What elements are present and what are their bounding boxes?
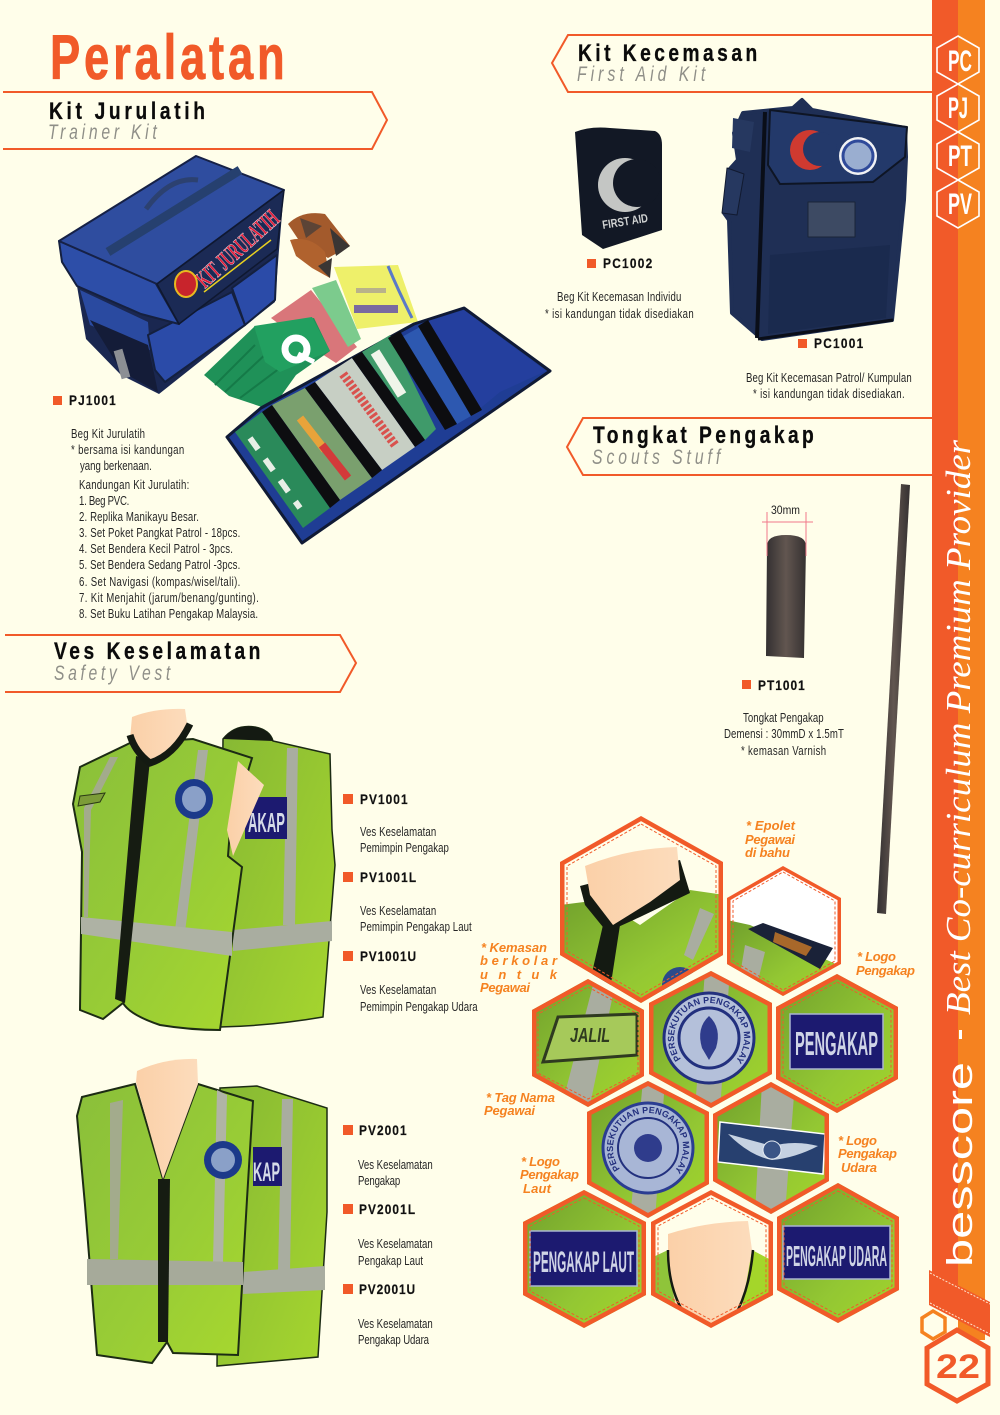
boots	[288, 213, 350, 278]
text: PV2001L description	[358, 1238, 433, 1268]
carry bag: KIT JURULATIH	[191, 205, 285, 293]
text: PV2001U description	[358, 1318, 433, 1347]
hexagon: sea scout logo: PERSEKUTUAN PENGAKAP MALAYSIA	[606, 1106, 690, 1174]
photo: first aid pouch	[575, 128, 662, 249]
heading: Ves Keselamatan: Safety Vest	[54, 661, 171, 685]
hexagon: name tag detail: JALIL	[570, 1025, 610, 1047]
note: collar: Pegawai	[480, 980, 530, 995]
carry bag	[59, 156, 285, 394]
note: air scout logo	[838, 1133, 897, 1175]
text: PV1001L description: Ves Keselamatan	[360, 905, 436, 918]
heading: Kit Jurulatih: Trainer Kit	[48, 120, 157, 144]
note: sea scout logo	[520, 1154, 579, 1196]
hexagon: Pengakap patch: PENGAKAP	[795, 1025, 878, 1062]
text: PV2001L description: Pengakap Laut	[358, 1255, 424, 1268]
book	[334, 265, 418, 329]
hexagon: Pengakap patch	[776, 974, 898, 1113]
note: scout logo: Pengakap	[856, 963, 915, 978]
roll-up pouch	[227, 308, 550, 543]
hexagon: air scout patch	[710, 1080, 832, 1216]
note: sea scout logo: Pengakap	[520, 1167, 579, 1182]
note: air scout logo: * Logo	[838, 1133, 877, 1148]
side tab: PC: PC	[948, 45, 972, 78]
text: PJ1001 description: 8. Set Buku Latihan Pengakap Malaysia.	[79, 608, 258, 621]
heading: Kit Jurulatih: Kit Jurulatih	[49, 97, 205, 125]
brand name: besscore	[939, 1062, 980, 1267]
text: PT1001 description: Demensi : 30mmD x 1.5mT	[724, 728, 844, 741]
heading: Tongkat Pengakap: Scouts Stuff	[592, 445, 722, 469]
note: collar	[480, 940, 558, 995]
text: PT1001 description: Tongkat Pengakap	[743, 712, 824, 725]
note: scout logo: * Logo	[857, 949, 896, 964]
text: PV1001L description: Pemimpin Pengakap Laut	[360, 921, 472, 934]
product: PV2001U: PV2001U	[359, 1281, 415, 1297]
text: PV1001U description: Pemimpin Pengakap Udara	[360, 1001, 478, 1014]
side tab: PT	[937, 132, 979, 180]
hexagon: Pengakap Udara patch	[777, 1183, 899, 1323]
small hexagon	[922, 1311, 945, 1339]
text: PJ1001 description: Kandungan Kit Jurulatih:	[79, 479, 189, 492]
text: PJ1001 description: * bersama isi kandungan	[71, 444, 184, 457]
side tab: PC	[937, 36, 979, 84]
side slogan: Best Co-curriculum Premium Provider	[939, 440, 978, 1015]
text: PV2001 description	[358, 1159, 433, 1188]
light green flag	[312, 280, 361, 347]
photo: collared safety vest	[73, 709, 335, 1030]
text: PV1001U description	[360, 984, 478, 1014]
product: PJ1001: PJ1001	[69, 392, 116, 408]
front vest	[73, 739, 252, 1030]
heading: Kit Kecemasan: Kit Kecemasan	[578, 39, 757, 67]
text: PJ1001 description: 4. Set Bendera Kecil Patrol - 3pcs.	[79, 543, 233, 556]
mannequin	[136, 1059, 198, 1179]
red flags	[271, 290, 357, 363]
note: epaulette: di bahu	[745, 845, 790, 860]
text: PJ1001 description: yang berkenaan.	[80, 460, 152, 473]
product: PV2001L: PV2001L	[359, 1201, 415, 1217]
product: PV2001: PV2001	[359, 1122, 407, 1138]
product: PC1001: PC1001	[814, 335, 863, 351]
text: PJ1001 description: 3. Set Poket Pangkat Patrol - 18pcs.	[79, 527, 240, 540]
photo: standard safety vest	[77, 1059, 327, 1366]
note: collar: untuk	[480, 967, 558, 982]
text: PC1001 description: Beg Kit Kecemasan Patrol/ Kumpulan	[746, 372, 912, 385]
heading: Kit Kecemasan: First Aid Kit	[577, 62, 706, 86]
hexagon: scout logo	[649, 971, 772, 1108]
photo: first aid backpack	[722, 100, 907, 339]
back vest: KAP	[253, 1157, 280, 1187]
note: air scout logo: Pengakap	[838, 1146, 897, 1161]
hexagon: Pengakap Laut patch	[520, 1186, 650, 1330]
note: name tag	[484, 1090, 555, 1118]
text: PJ1001 description: 5. Set Bendera Sedang Patrol -3pcs.	[79, 559, 240, 572]
text: PV1001 description: Ves Keselamatan	[360, 826, 436, 839]
product: PV1001: PV1001	[360, 791, 408, 807]
text: PJ1001 description: 6. Set Navigasi (kompas/wisel/tali).	[79, 576, 240, 589]
note: collar: * Kemasan	[481, 940, 547, 955]
side tab: PV	[937, 180, 979, 228]
text: PV2001U description: Ves Keselamatan	[358, 1318, 433, 1331]
hexagon: collar detail	[560, 816, 723, 1003]
note: epaulette: * Epolet	[746, 818, 796, 833]
text: PC1002 description: * isi kandungan tidak disediakan	[545, 308, 694, 321]
text: PV1001L description	[360, 905, 472, 934]
hexagon: sea scout logo	[587, 1081, 709, 1218]
photo: staff detail with 30mm dimension: 30mm	[771, 503, 800, 517]
side strip	[932, 0, 985, 1340]
text: PC1002 description	[545, 291, 694, 321]
back vest: AKAP	[248, 807, 285, 838]
note: collar: berkolar	[480, 953, 558, 968]
text: PV2001 description: Pengakap	[358, 1175, 400, 1188]
text: PC1001 description	[746, 372, 912, 401]
ribbon	[929, 1270, 990, 1337]
note: sea scout logo: * Logo	[521, 1154, 560, 1169]
note: name tag: * Tag Nama	[486, 1090, 555, 1105]
note: sea scout logo: Laut	[523, 1181, 552, 1196]
hexagon: epaulette detail	[727, 866, 841, 996]
text: PJ1001 description: 1. Beg PVC.	[79, 495, 129, 508]
page number: 22	[936, 1348, 980, 1386]
page number	[927, 1330, 988, 1401]
text: PV2001 description: Ves Keselamatan	[358, 1159, 433, 1172]
text: PV1001 description: Pemimpin Pengakap	[360, 842, 449, 855]
front vest	[77, 1084, 253, 1363]
text: PC1001 description: * isi kandungan tidak disediakan.	[753, 388, 905, 401]
text: PV2001U description: Pengakap Udara	[358, 1334, 430, 1347]
text: PC1002 description: Beg Kit Kecemasan Individu	[557, 291, 681, 304]
hexagon: vest neck detail	[651, 1190, 773, 1328]
photo: staff detail with 30mm dimension	[762, 503, 813, 658]
note: scout logo	[856, 949, 915, 978]
text: PJ1001 description: 2. Replika Manikayu Besar.	[79, 511, 199, 524]
photo: trainer kit bag and contents	[59, 156, 550, 543]
mannequin	[130, 709, 264, 856]
side tab: PV: PV	[948, 188, 972, 221]
heading: Kit Jurulatih	[3, 92, 387, 149]
side tab: PT: PT	[948, 140, 972, 173]
back vest	[217, 1086, 327, 1366]
photo: scout staff	[877, 484, 910, 914]
text: PENGAKAP LAUT	[533, 1246, 634, 1279]
product: PT1001: PT1001	[758, 677, 805, 693]
note: epaulette	[745, 818, 796, 860]
heading: Ves Keselamatan	[5, 635, 356, 692]
side dash	[959, 1030, 962, 1039]
text: PJ1001 description	[71, 428, 259, 621]
product: PC1002: PC1002	[603, 255, 652, 271]
product: PV1001L: PV1001L	[360, 869, 416, 885]
heading: Tongkat Pengakap: Tongkat Pengakap	[593, 421, 814, 449]
text: PV2001L description: Ves Keselamatan	[358, 1238, 433, 1251]
text: PJ1001 description: 7. Kit Menjahit (jarum/benang/gunting).	[79, 592, 259, 605]
note: name tag: Pegawai	[484, 1103, 535, 1118]
heading: Kit Kecemasan	[552, 35, 932, 92]
back vest	[220, 726, 335, 1027]
text: PT1001 description	[724, 712, 844, 758]
note: air scout logo: Udara	[841, 1160, 877, 1175]
green flags stack	[204, 317, 330, 410]
photo: first aid pouch: FIRST AID	[601, 211, 649, 232]
side tab: PJ	[937, 84, 979, 132]
hexagon: scout logo: PERSEKUTUAN PENGAKAP MALAYSIA	[668, 996, 750, 1064]
heading: Tongkat Pengakap	[567, 418, 932, 475]
title: Peralatan	[50, 22, 285, 93]
text: PJ1001 description: Beg Kit Jurulatih	[71, 428, 145, 441]
text: PT1001 description: * kemasan Varnish	[741, 745, 826, 758]
side tab: PJ: PJ	[948, 92, 968, 125]
text: PV1001 description	[360, 826, 449, 855]
hexagon: name tag detail	[532, 979, 644, 1107]
heading: Ves Keselamatan: Ves Keselamatan	[54, 637, 260, 665]
note: epaulette: Pegawai	[745, 832, 795, 847]
text: PV1001U description: Ves Keselamatan	[360, 984, 436, 997]
product: PV1001U: PV1001U	[360, 948, 416, 964]
